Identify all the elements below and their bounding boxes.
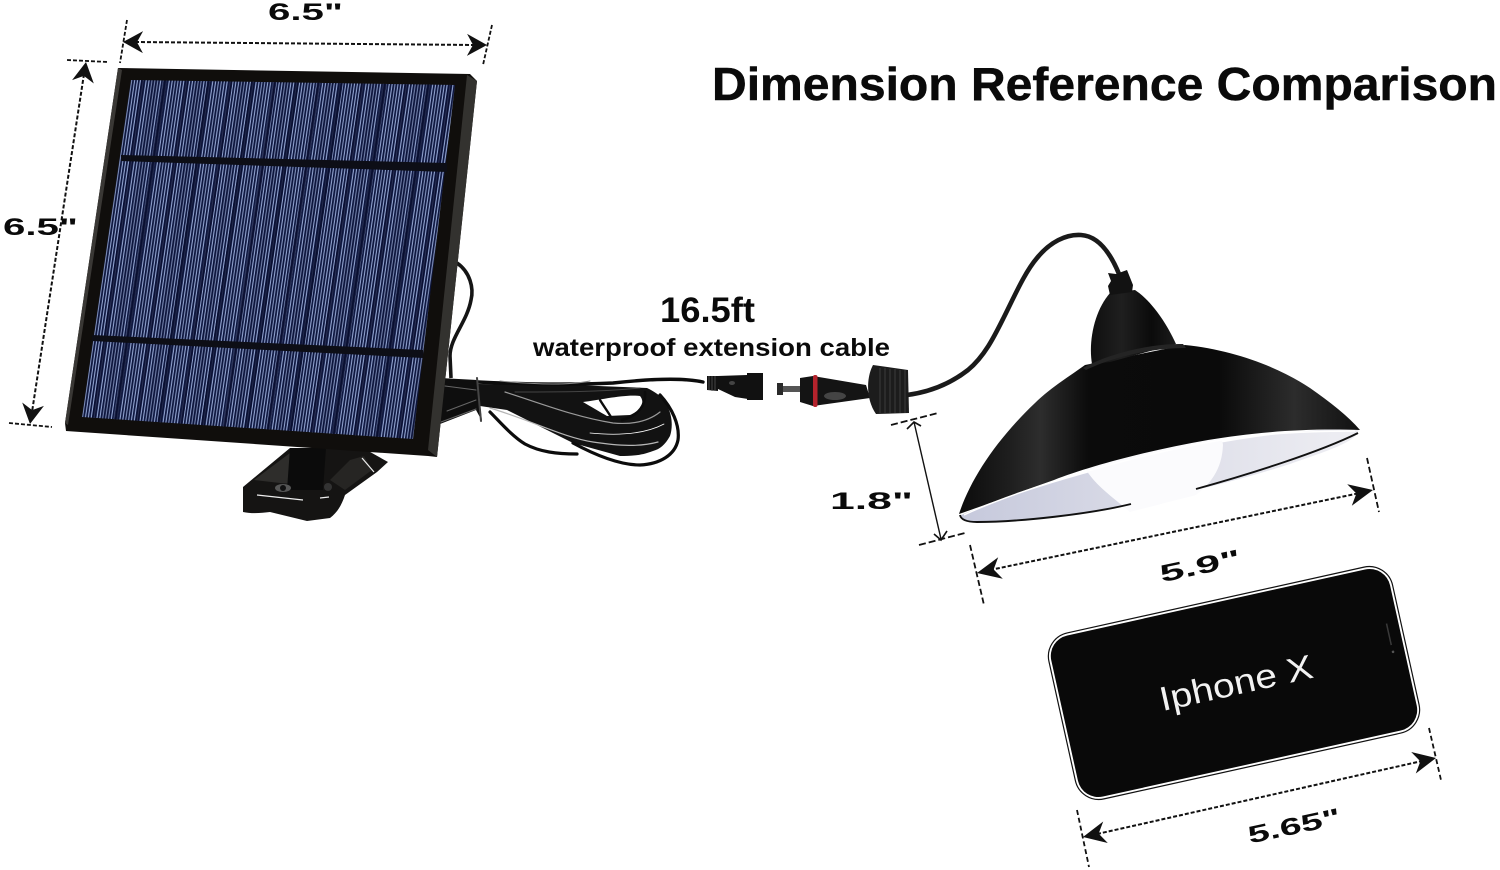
cell bus bars bbox=[121, 155, 447, 172]
lamp interior bbox=[961, 428, 1358, 522]
cable length label: waterproof extension cable bbox=[532, 334, 890, 362]
lamp cable bbox=[907, 235, 1119, 395]
male connector bbox=[777, 365, 909, 414]
dimension: lamp width: 5.9" bbox=[1157, 545, 1243, 588]
dimension: lamp height: 1.8" bbox=[830, 488, 913, 515]
panel frame bbox=[65, 68, 477, 457]
female connector bbox=[707, 373, 763, 400]
solar panel bbox=[60, 68, 480, 521]
white rim line bbox=[964, 431, 1355, 515]
neck rings bbox=[1108, 270, 1133, 295]
title: Dimension Reference Comparison bbox=[712, 58, 1497, 110]
dimension: lamp height bbox=[830, 413, 965, 545]
outer loop bbox=[573, 395, 678, 465]
cable tie bbox=[477, 378, 481, 421]
phone bbox=[1044, 562, 1424, 804]
lamp cap bbox=[1091, 290, 1176, 364]
phone label: Iphone X bbox=[1156, 648, 1316, 719]
threaded nut bbox=[868, 365, 909, 414]
cable bundle bbox=[440, 378, 482, 424]
bulb bbox=[1085, 434, 1223, 512]
dimension: solar panel height bbox=[3, 60, 108, 427]
crossing strand bbox=[600, 400, 611, 417]
cable length label bbox=[532, 291, 890, 362]
dimension: solar panel height: 6.5" bbox=[3, 214, 78, 241]
dimension: phone width: 5.65" bbox=[1246, 803, 1343, 849]
dimension: solar panel width bbox=[120, 0, 492, 65]
bundle highlights bbox=[441, 386, 476, 422]
right side strip bbox=[428, 75, 477, 457]
panel cable bbox=[450, 263, 472, 378]
cable coil bbox=[440, 378, 703, 465]
dimension: phone width bbox=[1077, 728, 1441, 867]
lower left loop bbox=[490, 412, 577, 454]
phone screen bbox=[1047, 565, 1421, 801]
lamp bbox=[959, 270, 1360, 522]
lower rim outline bbox=[960, 433, 1358, 522]
left side strip bbox=[65, 68, 122, 425]
strand highlights bbox=[505, 392, 660, 423]
mounting bracket bbox=[243, 448, 388, 521]
coil gap bbox=[583, 396, 642, 416]
cable length label: 16.5ft bbox=[660, 291, 755, 330]
phone body bbox=[1044, 562, 1424, 804]
red ring bbox=[813, 375, 818, 407]
camera bbox=[1391, 650, 1395, 653]
speaker bbox=[1386, 623, 1392, 645]
coil body bbox=[478, 384, 672, 456]
solar cells bbox=[82, 80, 455, 439]
dimension: lamp width bbox=[970, 458, 1379, 605]
main cable run bbox=[478, 379, 703, 384]
collar bbox=[1083, 344, 1186, 370]
lamp shade bbox=[959, 345, 1360, 514]
